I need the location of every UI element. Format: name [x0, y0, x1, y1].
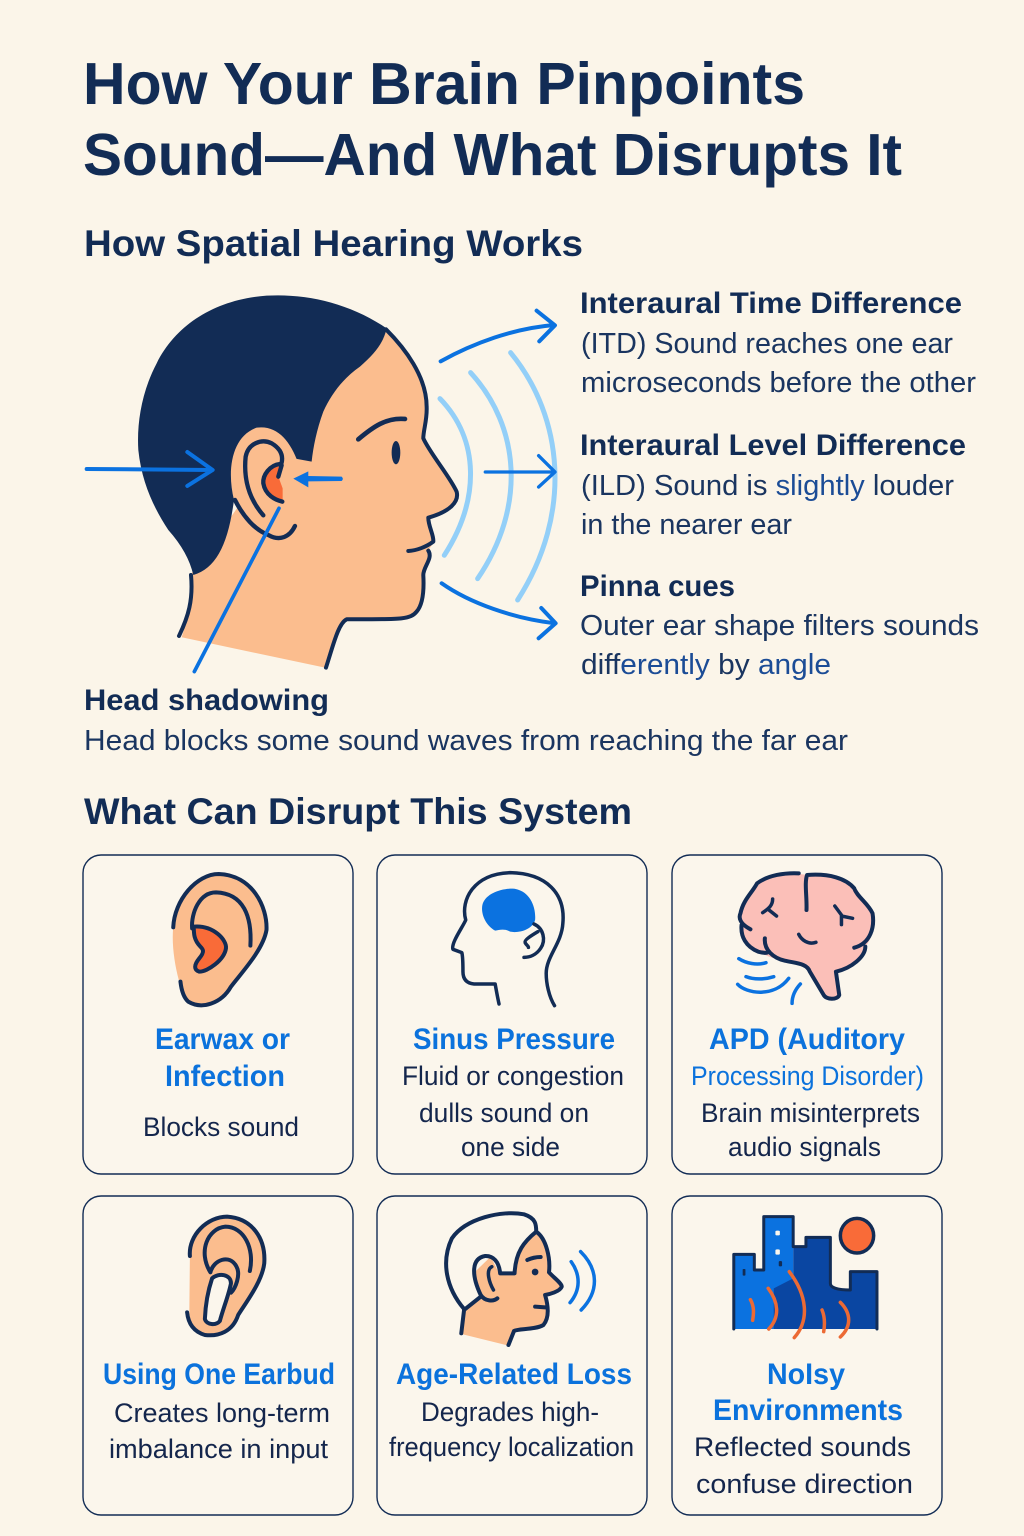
panel: APD: [672, 855, 942, 1174]
panel: sinus pressure: [377, 855, 647, 1174]
ear lines: [245, 441, 282, 515]
blue arrow: left: [87, 452, 213, 486]
label: Sinus Pressure: [413, 1023, 615, 1056]
text: interaural time difference: Interaural Time Difference: [580, 287, 962, 320]
panel: using one earbud: [83, 1196, 353, 1515]
text: interaural level difference: in the nearer ear: [581, 509, 792, 541]
skin: [182, 329, 457, 668]
description: Blocks sound: [143, 1112, 299, 1142]
description: one side: [461, 1132, 560, 1162]
text: interaural level difference: (ILD) Sound is slightly louder: [581, 470, 954, 502]
text: interaural time difference: [580, 287, 976, 399]
text: head shadowing: [84, 684, 848, 757]
ear canal: [265, 464, 283, 502]
description: Fluid or congestion: [402, 1061, 624, 1091]
text: interaural time difference: microseconds before the other: [581, 367, 976, 399]
description: [701, 1098, 920, 1162]
description: [389, 1397, 634, 1462]
label: Using One Earbud: [103, 1358, 335, 1391]
text: pinna cues: Outer ear shape filters sounds: [580, 610, 979, 642]
hair: [138, 295, 387, 575]
title: How Your Brain Pinpoints: [83, 51, 805, 117]
arrows right: [441, 311, 555, 361]
blue arrow: shadow line: [194, 508, 279, 672]
label: APD (Auditory: [709, 1023, 905, 1056]
label: [691, 1023, 924, 1091]
text: pinna cues: [580, 570, 979, 681]
heading: how spatial hearing works: How Spatial Hearing Works: [84, 223, 583, 264]
ear skin: [231, 427, 313, 538]
label: Environments: [713, 1394, 903, 1427]
description: frequency localization: [389, 1432, 634, 1462]
description: Brain misinterprets: [701, 1098, 920, 1128]
text: pinna cues: differently by angle: [581, 649, 831, 681]
diagram: head with sound waves: [87, 295, 556, 672]
icon: head with sinus: [453, 873, 563, 1006]
text: head shadowing: Head blocks some sound waves from reaching the far ear: [84, 725, 848, 757]
heading: what can disrupt this system: What Can Disrupt This System: [84, 791, 632, 832]
title: Sound—And What Disrupts It: [83, 122, 902, 188]
description: Degrades high-: [421, 1397, 599, 1427]
label: Processing Disorder): [691, 1061, 924, 1091]
icon: ear with blockage: [173, 874, 267, 1005]
label: Infection: [165, 1060, 285, 1093]
description: [109, 1398, 330, 1464]
title: [83, 51, 902, 188]
description: dulls sound on: [419, 1098, 589, 1128]
description: Creates long-term: [114, 1398, 330, 1428]
text: pinna cues: Pinna cues: [580, 570, 735, 603]
icon: city with reflected sound: [734, 1217, 877, 1338]
icon: brain with sound: [738, 873, 873, 1003]
label: [713, 1358, 903, 1427]
text: interaural level difference: Interaural Level Difference: [580, 429, 966, 462]
label: Earwax or: [155, 1023, 290, 1056]
icon: older head with sound: [446, 1213, 594, 1346]
description: [694, 1432, 913, 1499]
text: interaural time difference: (ITD) Sound reaches one ear: [581, 328, 953, 360]
panel: earwax or infection: [83, 855, 353, 1174]
description: confuse direction: [696, 1469, 913, 1499]
description: [402, 1061, 624, 1162]
description: audio signals: [728, 1132, 881, 1162]
description: imbalance in input: [109, 1434, 328, 1464]
text: head shadowing: Head shadowing: [84, 684, 329, 717]
waves: [440, 399, 471, 555]
head outline: [326, 329, 457, 668]
blue arrow: to ear: [293, 471, 343, 487]
label: Age-Related Loss: [396, 1358, 632, 1391]
description: Reflected sounds: [694, 1432, 911, 1462]
brow and eye: [358, 419, 405, 439]
icon: ear with earbud: [187, 1217, 264, 1335]
label: NoIsy: [767, 1358, 845, 1391]
text: interaural level difference: [580, 429, 966, 541]
panel: noisy environments: [672, 1196, 942, 1515]
label: [155, 1023, 290, 1093]
panel: age-related loss: [377, 1196, 647, 1515]
